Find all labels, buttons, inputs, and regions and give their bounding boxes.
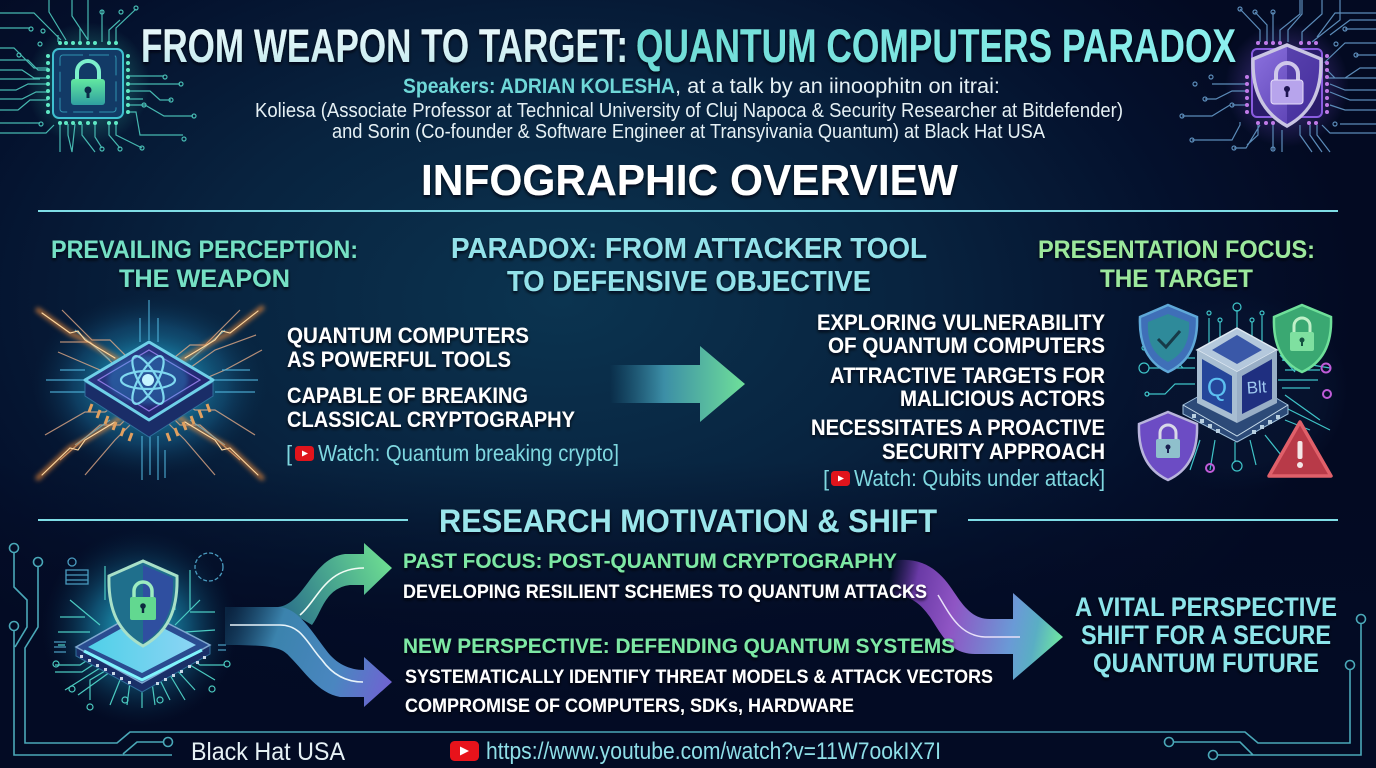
heading: presentation focus — [1038, 236, 1315, 293]
heading: paradox: TO DEFENSIVE OBJECTIVE — [507, 266, 871, 298]
icon: shield on chip — [42, 530, 238, 726]
title — [141, 19, 1236, 72]
heading: infographic overview: INFOGRAPHIC OVERVIEW — [421, 156, 958, 205]
heading: paradox — [451, 233, 927, 298]
text: weapon description: CAPABLE OF BREAKING — [287, 383, 528, 408]
text: target description: EXPLORING VULNERABILITY — [817, 310, 1105, 335]
text: target description: OF QUANTUM COMPUTERS — [828, 333, 1105, 358]
speakers text block: Speakers: ADRIAN KOLESHA — [403, 75, 675, 98]
speakers text block: , at a talk by an iinoophitn on itrai: — [675, 75, 1000, 98]
text: target description: SECURITY APPROACH — [882, 439, 1105, 464]
speakers text block: and Sorin (Co-founder & Software Engineer at Transyivania Quantum) at Black Hat USA — [332, 120, 1045, 143]
text: new perspective — [403, 635, 993, 717]
text: weapon description: CLASSICAL CRYPTOGRAPHY — [287, 407, 575, 432]
heading: paradox: PARADOX: FROM ATTACKER TOOL — [451, 233, 927, 265]
icon: circuit shield, top right — [1180, 0, 1376, 152]
link: watch quantum breaking crypto: [ — [286, 441, 292, 466]
title: FROM WEAPON TO TARGET: — [141, 19, 628, 72]
text: conclusion: QUANTUM FUTURE — [1093, 648, 1319, 678]
icon: circuit padlock, top left — [0, 0, 196, 152]
text: past focus: DEVELOPING RESILIENT SCHEMES TO QUANTUM ATTACKS — [403, 582, 927, 603]
footer: event name: Black Hat USA — [191, 738, 345, 766]
circuit frame: bottom — [10, 544, 1366, 760]
arrow: split to past focus — [278, 543, 392, 625]
text: weapon description — [287, 323, 575, 432]
text: conclusion: SHIFT FOR A SECURE — [1081, 620, 1331, 650]
footer: video link: https://www.youtube.com/watch?v=11W7ookIX7I — [486, 738, 941, 765]
speakers text block: Koliesa (Associate Professor at Technical University of Cluj Napoca & Security Researcher at Bitdefender) — [255, 99, 1123, 122]
text: past focus: PAST FOCUS: POST-QUANTUM CRYPTOGRAPHY — [403, 550, 897, 573]
text: target description: NECESSITATES A PROACTIVE — [811, 415, 1105, 440]
link: watch qubits under attack: Watch: Qubits under attack] — [854, 465, 1105, 491]
heading: presentation focus: PRESENTATION FOCUS: — [1038, 236, 1315, 264]
text: weapon description: AS POWERFUL TOOLS — [287, 347, 511, 372]
heading: prevailing perception: THE WEAPON — [119, 265, 290, 293]
text: past focus — [403, 550, 927, 603]
icon: target cube with shields: Blt — [1246, 377, 1267, 398]
arrow: split to new perspective — [225, 607, 392, 707]
text: new perspective: NEW PERSPECTIVE: DEFENDING QUANTUM SYSTEMS — [403, 635, 955, 658]
link: watch qubits under attack: [ — [823, 466, 829, 491]
text: weapon description: QUANTUM COMPUTERS — [287, 323, 529, 348]
text: new perspective: COMPROMISE OF COMPUTERS, SDKs, HARDWARE — [405, 696, 854, 717]
text: target description — [811, 310, 1105, 464]
heading: prevailing perception — [51, 236, 358, 293]
icon: weapon quantum chip — [32, 293, 268, 480]
text: new perspective: SYSTEMATICALLY IDENTIFY THREAT MODELS & ATTACK VECTORS — [405, 667, 993, 688]
arrow: weapon to target — [610, 346, 745, 422]
icon: target cube with shields — [1124, 292, 1348, 492]
text: conclusion: A VITAL PERSPECTIVE — [1075, 592, 1337, 622]
text: target description: ATTRACTIVE TARGETS FOR — [830, 363, 1105, 388]
heading: research motivation and shift: RESEARCH MOTIVATION & SHIFT — [439, 503, 937, 539]
heading: prevailing perception: PREVAILING PERCEPTION: — [51, 236, 358, 264]
text: target description: MALICIOUS ACTORS — [900, 386, 1105, 411]
icon: target cube with shields: Q — [1207, 372, 1227, 402]
arrow: shift to secure future — [885, 560, 1063, 680]
speakers text block — [255, 75, 1123, 143]
heading: presentation focus: THE TARGET — [1100, 265, 1253, 293]
link: watch quantum breaking crypto: Watch: Quantum breaking crypto] — [318, 440, 619, 466]
text: conclusion — [1075, 592, 1337, 678]
